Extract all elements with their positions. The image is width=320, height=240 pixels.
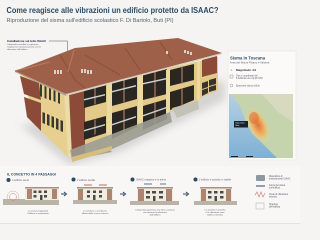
step 3: che attenua le vibrazioni [143, 211, 167, 214]
legend: sull'edificio [269, 188, 281, 190]
panel: Sisma in Toscana: Area del Monte Pisano e Valdera [230, 60, 270, 64]
quake facts: Epicentro vicino a Buti [236, 84, 260, 88]
step 3: I dispositivi generano una forza contraria [135, 208, 175, 212]
step 3 [130, 178, 179, 216]
main facade [64, 61, 200, 158]
legend: dell'edificio [269, 206, 281, 208]
ground shadow [20, 80, 225, 165]
subtitle: Riproduzione del sisma sull'edificio scolastico F. Di Bartolo, Buti (PI) [6, 18, 174, 24]
map of Tuscany: Buti [236, 124, 240, 127]
right block [200, 56, 218, 98]
callout: installazione: Installazione sul tetto ISAAC [7, 39, 47, 43]
windows [84, 64, 194, 140]
step 2: L'edificio oscilla [77, 178, 95, 182]
legend: Dispositivo di [269, 175, 283, 178]
quake facts: Magnitudo 4.0 [236, 68, 256, 72]
step 2: La struttura si oscilla per [83, 210, 107, 212]
callout: installazione: I dispositivi installati in copertura [7, 43, 39, 46]
legend: smorzamento ISAAC [269, 178, 291, 180]
quake facts: 6 febbraio ore 21:48 UTC [236, 77, 263, 80]
left wall [20, 75, 68, 157]
legend: sismica [269, 196, 277, 198]
ramp and stairs [70, 101, 199, 162]
panel: Sisma in Toscana [228, 51, 296, 160]
legend: Onde di vibrazione [269, 193, 289, 196]
arrow [61, 192, 66, 196]
map of Tuscany: Epicentro [236, 122, 246, 125]
quake facts: Ore e coordinate del [236, 74, 258, 78]
step 1: l'edificio in movimento [27, 212, 49, 215]
callout: installazione: reagiscono istantaneamente con le [7, 46, 42, 48]
map of Tuscany [229, 94, 293, 158]
callout: installazione: vibrazioni sull'edificio [7, 48, 28, 51]
step 4: La struttura è protetta [205, 208, 226, 212]
callout: installazione [7, 39, 68, 56]
step 4: ridotte al minimo [207, 214, 224, 216]
arrow [120, 192, 126, 196]
step 4 [194, 178, 237, 216]
legend [255, 175, 291, 209]
building illustration [15, 38, 225, 165]
step 2: effetto della scossa sismica [82, 212, 109, 215]
legend: Forza del sisma [269, 184, 286, 187]
step 1: L'edificio sente [12, 178, 30, 182]
step 1 [3, 178, 59, 215]
window mullions [94, 66, 183, 135]
quake facts: ∿ [230, 68, 233, 72]
step 4: L'edificio è protetto e stabile [199, 178, 232, 182]
section heading: IL CONCETTO IN 4 PASSAGGI [7, 172, 56, 176]
step 2 [72, 178, 117, 215]
arrow [183, 192, 188, 196]
legend: Struttura [269, 203, 279, 206]
step 1: La scossa raggiunge [28, 210, 49, 212]
roof devices [54, 50, 192, 74]
pillars [107, 61, 200, 152]
sills [84, 78, 166, 132]
roof [15, 38, 222, 96]
panel: concept in four steps [0, 166, 300, 224]
panel heading: Sisma in Toscana [230, 56, 266, 60]
step 4: e le vibrazioni sono [206, 211, 225, 214]
quake facts [230, 68, 263, 88]
step 3: dell'edificio [150, 214, 161, 216]
title: Come reagisce alle vibrazioni un edificio protetto da ISAAC? [6, 6, 219, 15]
step 3: ISAAC reagisce e si attiva [136, 178, 167, 182]
